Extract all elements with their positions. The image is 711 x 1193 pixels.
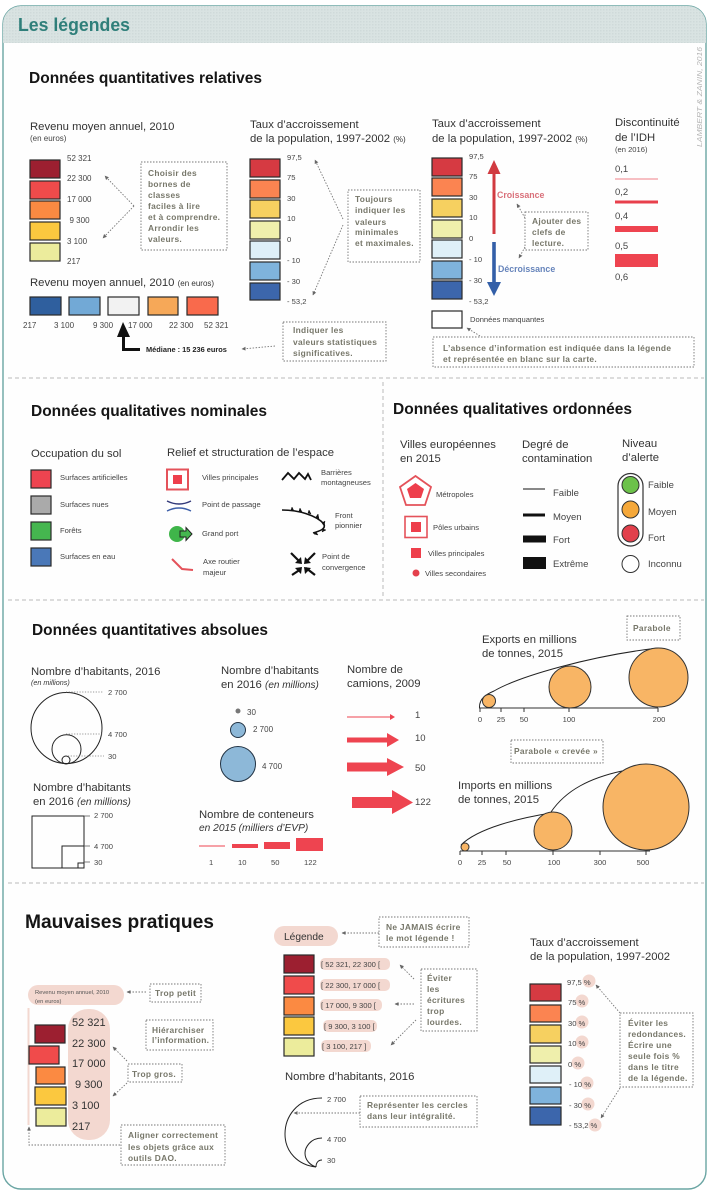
chart: parabole exports [478, 634, 688, 724]
callout: clefs de lecture: Ajouter des [532, 216, 581, 226]
callout: trop petit: Trop petit [155, 988, 196, 998]
legend: degré de contamination: contamination [522, 453, 592, 465]
panel: données quantitatives relatives [23, 70, 694, 367]
legend: écritures lourdes: [ 9 300, 3 100 [ [324, 1022, 376, 1031]
callout: hiérarchiser: l’information. [152, 1035, 209, 1045]
legend: cercles emboîtés: (en millions) [31, 678, 70, 687]
legend: cercles incomplets: 4 700 [327, 1135, 346, 1144]
legend: niveau d'alerte [618, 438, 682, 572]
legend: cercles emboîtés: 2 700 [108, 688, 127, 697]
icon: point de convergence: Point de [322, 552, 350, 561]
icon: front pionnier [282, 507, 362, 535]
icon: point de convergence: convergence [322, 563, 365, 572]
legend: niveau d'alerte: Faible [648, 480, 674, 491]
icon: point de passage [167, 500, 261, 511]
legend: occupation du sol: Surfaces artificielles [60, 473, 128, 482]
callout: cercles intégraux: Représenter les cercles [367, 1100, 468, 1110]
callout: valeurs statistiques: Indiquer les [293, 325, 344, 335]
callout: éviter les redondances: Éviter les [628, 1017, 668, 1028]
callout: parabole [627, 616, 680, 640]
legend: revenu horizontal: 22 300 [169, 321, 194, 330]
callout: aligner: outils DAO. [128, 1153, 177, 1163]
legend: revenu horizontal [23, 277, 229, 330]
legend: taux 1: de la population, 1997-2002 (%) [250, 133, 406, 145]
legend: taux 1: 75 [287, 173, 295, 182]
legend: cercles incomplets: 2 700 [327, 1095, 346, 1104]
legend: taux 1: - 53,2 [287, 297, 306, 306]
legend: flèches camions: 1 [415, 710, 420, 721]
heading: Données qualitatives ordonnées [393, 401, 632, 418]
legend: cercles séparés: 2 700 [253, 725, 274, 734]
arrow: médiane [117, 322, 227, 354]
chart: parabole imports: de tonnes, 2015 [458, 794, 539, 806]
icon: grand port [169, 526, 239, 542]
callout: hiérarchiser [146, 1020, 213, 1050]
legend: taux 2 avec flèches: 0 [469, 234, 473, 243]
legend: villes européennes: Villes secondaires [425, 569, 486, 578]
legend: discontinuité: Discontinuité [615, 117, 680, 129]
legend: taux 2 avec flèches: Données manquantes [470, 315, 545, 324]
legend: niveau d'alerte: Moyen [648, 507, 677, 518]
callout: valeurs minimales et maximales: minimales [355, 227, 399, 237]
callout: éviter les redondances [596, 985, 693, 1118]
chart: parabole imports [458, 764, 689, 867]
callout: cercles intégraux: dans leur intégralité. [367, 1111, 456, 1121]
legend: niveau d'alerte: Inconnu [648, 559, 682, 570]
panel: mauvaises pratiques [25, 911, 693, 1167]
legend: taux 1: - 10 [287, 256, 300, 265]
callout: valeurs statistiques: significatives. [293, 348, 353, 358]
legend: occupation du sol [31, 448, 128, 566]
legend: redondances: - 53,2 % [569, 1121, 598, 1130]
legend: villes européennes [400, 439, 496, 578]
legend: revenu vertical: Revenu moyen annuel, 2010 [30, 121, 174, 133]
callout: éviter les redondances: dans le titre [628, 1062, 679, 1072]
callout: éviter les écritures: trop [427, 1006, 444, 1016]
legend: taux 1: 30 [287, 194, 295, 203]
legend: redondances: Taux d’accroissement [530, 937, 639, 949]
legend: niveau d'alerte: Niveau [622, 438, 657, 450]
legend: taux 1: 97,5 [287, 153, 302, 162]
callout: éviter les écritures: lourdes. [427, 1017, 462, 1027]
legend: écritures lourdes: [ 17 000, 9 300 [ [321, 1001, 377, 1010]
callout: trop gros: Trop gros. [132, 1069, 176, 1079]
legend: degré de contamination: Faible [553, 488, 579, 499]
callout: bornes de classes: faciles à lire [148, 201, 200, 211]
legend: écritures lourdes [274, 926, 390, 1056]
callout: bornes de classes: et à comprendre. [148, 212, 220, 222]
legend: cercles emboîtés: 4 700 [108, 730, 127, 739]
legend: carrés emboîtés: 4 700 [94, 842, 113, 851]
callout: éviter les écritures: écritures [427, 995, 465, 1005]
chart: parabole exports: 100 [563, 715, 575, 724]
callout: mot légende: Ne JAMAIS écrire [386, 922, 461, 932]
legend: villes européennes: en 2015 [400, 453, 441, 465]
legend: revenu horizontal: 9 300 [93, 321, 114, 330]
callout: éviter les écritures [391, 965, 477, 1045]
source credit: LAMBERT & ZANIN, 2016 [695, 46, 704, 147]
legend: revenu horizontal: Revenu moyen annuel, 2010 (en euros) [30, 277, 214, 289]
legend: cercles emboîtés: 30 [108, 752, 116, 761]
legend: flèches camions [347, 664, 431, 814]
icon: grand port: Grand port [202, 529, 239, 538]
legend: revenu vertical: 9 300 [70, 216, 90, 225]
icon: front pionnier: pionnier [335, 521, 362, 530]
legend: cercles séparés: 4 700 [262, 762, 283, 771]
callout: aligner: les objets grâce aux [128, 1142, 214, 1152]
legend: revenu vertical: 217 [67, 257, 81, 266]
callout: éviter les redondances: de la légende. [628, 1073, 688, 1083]
legend: flèches camions: 10 [415, 733, 426, 744]
legend: discontinuité: de l’IDH [615, 132, 655, 144]
arrow: décroissance [487, 242, 555, 296]
legend: barres conteneurs: 10 [238, 858, 246, 867]
legend: taux 2 avec flèches: - 10 [469, 255, 482, 264]
chart: parabole exports: 200 [653, 715, 665, 724]
legend: cercles séparés [220, 665, 319, 782]
legend: taux 1: - 30 [287, 277, 300, 286]
legend: mauvais alignement [28, 985, 124, 1140]
legend: revenu vertical: 3 100 [67, 237, 88, 246]
legend: flèches camions: camions, 2009 [347, 678, 420, 690]
callout: trop petit [127, 984, 201, 1002]
legend: carrés emboîtés: en 2016 (en millions) [33, 796, 131, 808]
legend: taux 1: Taux d’accroissement [250, 119, 359, 131]
legend: redondances: 30 % [568, 1019, 586, 1028]
legend: taux 2 avec flèches: 97,5 [469, 152, 484, 161]
panel: données qualitatives ordonnées [393, 401, 682, 578]
callout: aligner: Aligner correctement [128, 1130, 218, 1140]
icon: barrières montagneuses [282, 468, 371, 487]
legend: relief et structuration: Relief et structuration de l’espace [167, 447, 334, 459]
legend: revenu vertical: 17 000 [67, 195, 92, 204]
title: Les légendes [18, 14, 130, 35]
legend: flèches camions: 122 [415, 797, 431, 808]
legend: barres conteneurs: 1 [209, 858, 213, 867]
legend: revenu horizontal: 217 [23, 321, 37, 330]
legend: carrés emboîtés: Nombre d’habitants [33, 782, 131, 794]
arrow: médiane: Médiane : 15 236 euros [146, 345, 227, 354]
legend: discontinuité: 0,1 [615, 164, 628, 175]
callout: valeurs minimales et maximales: et maximales. [355, 238, 414, 248]
icon: point de convergence [291, 552, 365, 575]
legend: mauvais alignement: Revenu moyen annuel, 2010 [35, 990, 109, 996]
panel: données quantitatives absolues [31, 616, 689, 868]
callout: mot légende [342, 917, 469, 947]
callout: éviter les redondances: seule fois % [628, 1051, 680, 1061]
chart: parabole exports: Exports en millions [482, 634, 577, 646]
legend: barres conteneurs: en 2015 (milliers d’EVP) [199, 823, 308, 834]
callout: bornes de classes: Arrondir les [148, 223, 199, 233]
legend: villes européennes: Villes européennes [400, 439, 496, 451]
legend: mauvais alignement: 217 [72, 1121, 90, 1133]
legend: discontinuité: 0,5 [615, 241, 628, 252]
legend: relief et structuration [167, 447, 371, 577]
callout: valeurs minimales et maximales: indiquer les [355, 205, 406, 215]
legend: cercles séparés: en 2016 (en millions) [221, 679, 319, 691]
callout: absence d'information [433, 328, 694, 367]
callout: aligner [29, 1125, 225, 1165]
legend: barres conteneurs: 50 [271, 858, 279, 867]
legend: redondances: 97,5 % [567, 978, 591, 987]
legend: redondances: - 30 % [569, 1101, 591, 1110]
callout: valeurs minimales et maximales: valeurs [355, 217, 386, 227]
legend: taux 2 avec flèches: de la population, 1997-2002 (%) [432, 133, 588, 145]
icon: barrières montagneuses: montagneuses [321, 478, 371, 487]
callout: clefs de lecture: lecture. [532, 238, 564, 248]
legend: cercles incomplets: 30 [327, 1156, 335, 1165]
legend: revenu vertical: (en euros) [30, 134, 67, 143]
legend: taux 2 avec flèches: Taux d’accroissement [432, 118, 541, 130]
legend: cercles incomplets [285, 1071, 414, 1167]
legend: flèches camions: Nombre de [347, 664, 403, 676]
legend: mauvais alignement: 3 100 [72, 1100, 100, 1112]
legend: écritures lourdes: [ 52 321, 22 300 [ [321, 960, 381, 969]
legend: carrés emboîtés [32, 782, 131, 868]
callout: valeurs statistiques [242, 322, 386, 361]
legend: revenu horizontal: 17 000 [128, 321, 153, 330]
legend: discontinuité [615, 117, 680, 283]
legend: redondances: de la population, 1997-2002 [530, 951, 670, 963]
callout: valeurs statistiques: valeurs statistiques [293, 337, 377, 347]
legend: degré de contamination: Extrême [553, 559, 588, 570]
chart: parabole imports: 500 [637, 858, 649, 867]
legend: cercles emboîtés [31, 666, 160, 764]
legend: revenu horizontal: 52 321 [204, 321, 229, 330]
callout: bornes de classes: bornes de [148, 179, 191, 189]
legend: degré de contamination [522, 439, 592, 570]
heading: Données qualitatives nominales [31, 403, 267, 420]
callout: éviter les redondances: redondances. [628, 1029, 686, 1039]
icon: villes principales [167, 470, 259, 490]
legend: villes européennes: Métropoles [436, 490, 474, 499]
legend: mauvais alignement: (en euros) [35, 999, 61, 1005]
legend: niveau d'alerte: d’alerte [622, 452, 659, 464]
chart: parabole exports: 50 [520, 715, 528, 724]
legend: revenu horizontal: 3 100 [54, 321, 75, 330]
legend: taux 1 [250, 119, 406, 306]
icon: axe routier: majeur [203, 568, 227, 577]
chart: parabole imports: 50 [503, 858, 511, 867]
heading: Données quantitatives absolues [32, 622, 268, 639]
legend: cercles séparés: 30 [247, 708, 256, 717]
callout: cercles intégraux [294, 1096, 477, 1127]
legend: discontinuité: (en 2016) [615, 145, 648, 154]
legend: degré de contamination: Degré de [522, 439, 568, 451]
legend: degré de contamination: Moyen [553, 512, 582, 523]
callout: clefs de lecture: clefs de [532, 227, 566, 237]
callout: éviter les redondances: Écrire une [628, 1039, 672, 1050]
legend: niveau d'alerte: Fort [648, 533, 665, 544]
arrow: décroissance: Décroissance [498, 264, 555, 274]
callout: absence d'information: L’absence d’information est indiquée dans la légende [443, 343, 671, 353]
icon: front pionnier: Front [335, 511, 354, 520]
legend: villes européennes: Pôles urbains [433, 523, 479, 532]
legend: écritures lourdes: [ 22 300, 17 000 [ [321, 981, 381, 990]
callout: clefs de lecture [517, 204, 588, 258]
legend: taux 2 avec flèches: 75 [469, 172, 477, 181]
legend: villes européennes: Villes principales [428, 549, 485, 558]
chart: parabole exports: 25 [497, 715, 505, 724]
callout: parabole crevée [511, 740, 603, 763]
callout: valeurs minimales et maximales: Toujours [355, 194, 393, 204]
icon: villes principales: Villes principales [202, 473, 259, 482]
legend: redondances: 0 % [568, 1060, 581, 1069]
legend: revenu vertical [30, 121, 174, 266]
legend: mauvais alignement: 9 300 [75, 1079, 103, 1091]
legend: carrés emboîtés: 2 700 [94, 811, 113, 820]
legend: carrés emboîtés: 30 [94, 858, 102, 867]
legend: redondances [530, 937, 670, 1132]
legend: redondances: - 10 % [569, 1080, 591, 1089]
legend: occupation du sol: Surfaces nues [60, 500, 109, 509]
icon: axe routier: Axe routier [203, 557, 240, 566]
arrow: croissance [488, 160, 545, 234]
legend: cercles incomplets: Nombre d’habitants, 2016 [285, 1071, 414, 1083]
callout: éviter les écritures: Éviter [427, 972, 453, 983]
legend: taux 1: 0 [287, 235, 291, 244]
callout: trop gros [113, 1047, 182, 1096]
legend: mauvais alignement: 52 321 [72, 1017, 106, 1029]
heading: Données quantitatives relatives [29, 70, 262, 87]
chart: parabole imports: Imports en millions [458, 780, 553, 792]
legend: taux 2 avec flèches [432, 118, 588, 328]
legend: mauvais alignement: 22 300 [72, 1038, 106, 1050]
arrow: croissance: Croissance [497, 190, 545, 200]
legend: redondances: 75 % [568, 998, 586, 1007]
chart: parabole exports: de tonnes, 2015 [482, 648, 563, 660]
callout: mot légende: le mot légende ! [386, 933, 455, 943]
legend: occupation du sol: Forêts [60, 526, 82, 535]
legend: écritures lourdes: [ 3 100, 217 ] [322, 1042, 366, 1051]
legend: revenu vertical: 22 300 [67, 174, 92, 183]
legend: barres conteneurs: Nombre de conteneurs [199, 809, 314, 821]
icon: axe routier [172, 557, 240, 577]
legend: discontinuité: 0,6 [615, 272, 628, 283]
legend: taux 2 avec flèches: - 30 [469, 276, 482, 285]
chart: parabole exports: 0 [478, 715, 482, 724]
legend: discontinuité: 0,4 [615, 211, 628, 222]
chart: parabole imports: 300 [594, 858, 606, 867]
legend: redondances: 10 % [568, 1039, 586, 1048]
legend: cercles emboîtés: Nombre d’habitants, 2016 [31, 666, 160, 678]
callout: bornes de classes [103, 162, 227, 250]
callout: bornes de classes: Choisir des [148, 168, 197, 178]
legend: cercles séparés: Nombre d’habitants [221, 665, 319, 677]
chart: parabole imports: 25 [478, 858, 486, 867]
legend: occupation du sol: Occupation du sol [31, 448, 121, 460]
legend: taux 2 avec flèches: - 53,2 [469, 297, 488, 306]
icon: barrières montagneuses: Barrières [321, 468, 352, 477]
legend: écritures lourdes: Légende [284, 932, 324, 943]
panel: données qualitatives nominales [31, 403, 371, 577]
legend: barres conteneurs: 122 [304, 858, 317, 867]
legend: mauvais alignement: 17 000 [72, 1058, 106, 1070]
callout: bornes de classes: classes [148, 190, 180, 200]
callout: parabole crevée: Parabole « crevée » [514, 746, 598, 756]
legend: revenu vertical: 52 321 [67, 154, 92, 163]
legend: occupation du sol: Surfaces en eau [60, 552, 115, 561]
legend: taux 2 avec flèches: 30 [469, 193, 477, 202]
legend: flèches camions: 50 [415, 763, 426, 774]
legend: degré de contamination: Fort [553, 535, 570, 546]
legend: barres conteneurs [199, 809, 323, 867]
legend: discontinuité: 0,2 [615, 187, 628, 198]
callout: bornes de classes: valeurs. [148, 234, 182, 244]
callout: hiérarchiser: Hiérarchiser [152, 1025, 205, 1035]
heading: Mauvaises pratiques [25, 911, 214, 933]
legend: taux 2 avec flèches: 10 [469, 213, 477, 222]
icon: point de passage: Point de passage [202, 500, 261, 509]
callout: éviter les écritures: les [427, 984, 440, 994]
legend: taux 1: 10 [287, 214, 295, 223]
callout: valeurs minimales et maximales [313, 160, 420, 295]
callout: parabole: Parabole [633, 623, 671, 633]
callout: absence d'information: et représentée en blanc sur la carte. [443, 354, 597, 364]
chart: parabole imports: 0 [458, 858, 462, 867]
chart: parabole imports: 100 [548, 858, 560, 867]
